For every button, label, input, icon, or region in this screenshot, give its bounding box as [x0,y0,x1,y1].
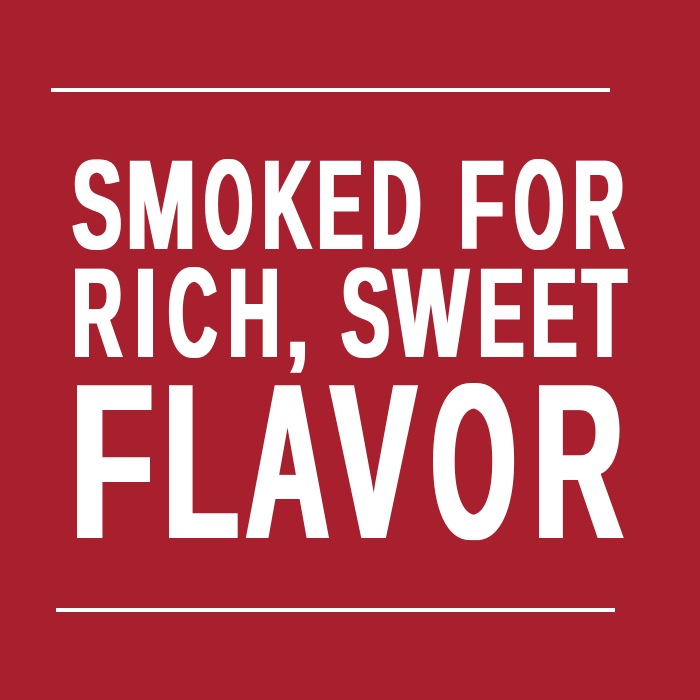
heading line: rich, sweet: E [478,241,524,384]
heading line: rich, sweet: W [394,242,469,385]
heading line: smoked for: M [126,133,196,276]
heading line: rich, sweet: C [168,241,217,384]
heading line: smoked for: O [514,135,564,277]
heading line: smoked for: S [72,134,122,277]
heading line: flavor [71,337,623,586]
heading line: rich, sweet: S [341,243,390,385]
top rule [51,88,610,92]
heading line: smoked for: O [204,134,253,277]
heading line: rich, sweet: H [228,241,280,384]
heading line: flavor: L [164,337,238,585]
heading line: rich, sweet: , [287,265,308,380]
heading line: rich, sweet [72,241,626,385]
heading line: smoked for [72,133,624,277]
heading line: rich, sweet: I [135,243,156,385]
heading line: smoked for: E [317,133,363,276]
heading line: flavor: R [534,338,623,586]
heading line: smoked for: K [262,133,311,277]
heading line: rich, sweet: E [531,241,577,384]
heading line: smoked for: F [459,134,504,277]
heading line: flavor: V [331,338,416,586]
heading line: smoked for: D [371,133,421,276]
heading line: flavor: F [71,337,153,585]
heading line: flavor: A [246,338,329,586]
heading line: rich, sweet: T [583,242,626,385]
bottom rule [56,608,615,612]
heading line: flavor: O [432,338,516,586]
heading line: smoked for: R [573,133,624,276]
heading line: rich, sweet: R [72,241,122,384]
